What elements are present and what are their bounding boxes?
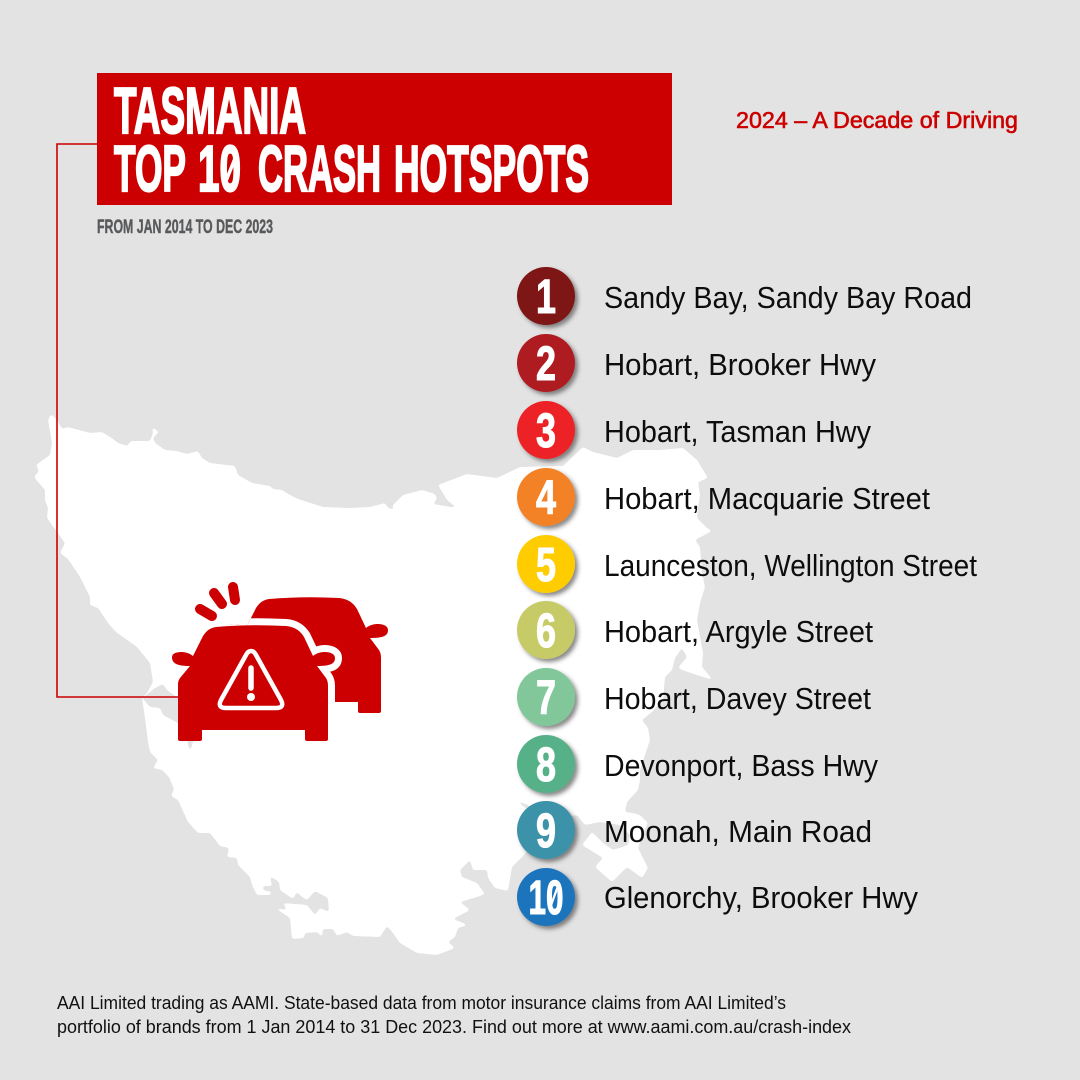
item 7: Hobart, Davey Street: [604, 681, 871, 716]
item 5: Launceston, Wellington Street: [604, 548, 977, 583]
title line 2: [114, 132, 589, 205]
item 7: [517, 668, 871, 726]
item 6: [517, 601, 873, 659]
item 1: [517, 267, 972, 325]
item 2: Hobart, Brooker Hwy: [604, 347, 876, 382]
item 10: 10: [528, 872, 564, 925]
title line 2: HOTSPOTS: [394, 132, 589, 205]
item 9: Moonah, Main Road: [604, 814, 872, 849]
footnote: [57, 992, 852, 1037]
footnote: portfolio of brands from 1 Jan 2014 to 31 Dec 2023. Find out more at www.aami.com.au/crash-index: [57, 1016, 852, 1037]
item 9: [517, 801, 872, 859]
item 2: [517, 334, 876, 392]
item 3: [517, 401, 871, 459]
item 8: 8: [536, 739, 556, 792]
item 5: 5: [536, 539, 556, 592]
item 8: [517, 735, 878, 793]
item 8: Devonport, Bass Hwy: [604, 748, 878, 783]
map of Tasmania: [34, 414, 713, 955]
title line 2: 10: [198, 132, 241, 205]
item 10: Glenorchy, Brooker Hwy: [604, 880, 918, 915]
title line 1: TASMANIA: [114, 74, 306, 147]
item 6: 6: [536, 605, 556, 658]
footnote: AAI Limited trading as AAMI. State-based data from motor insurance claims from AAI Limited’s: [57, 992, 786, 1013]
item 1: Sandy Bay, Sandy Bay Road: [604, 280, 972, 315]
item 6: Hobart, Argyle Street: [604, 614, 873, 649]
item 10: [517, 868, 918, 926]
item 9: 9: [536, 805, 556, 858]
item 2: 2: [536, 338, 556, 391]
item 3: Hobart, Tasman Hwy: [604, 414, 871, 449]
title banner: [97, 73, 672, 205]
item 7: 7: [536, 672, 556, 725]
item 1: 1: [536, 271, 556, 324]
item 4: Hobart, Macquarie Street: [604, 481, 930, 516]
item 4: 4: [536, 472, 556, 525]
title line 2: TOP: [114, 132, 186, 205]
subtitle: date range: FROM JAN 2014 TO DEC 2023: [97, 217, 273, 238]
title line 2: CRASH: [258, 132, 381, 205]
ranked list of hotspots: [517, 267, 977, 926]
connector line: [57, 144, 178, 697]
item 4: [517, 468, 930, 526]
icon: crashed cars with warning: [57, 144, 388, 741]
heading: campaign tag: 2024 – A Decade of Driving: [736, 107, 1018, 133]
item 5: [517, 535, 977, 593]
item 3: 3: [536, 405, 556, 458]
